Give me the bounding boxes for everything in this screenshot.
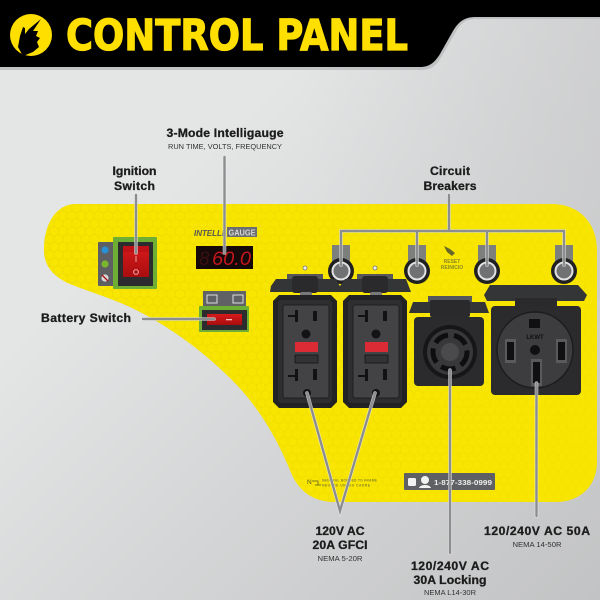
label: 3-mode intelligauge: RUN TIME, VOLTS, FREQUENCY xyxy=(168,142,282,151)
label: 3-mode intelligauge: 3-Mode Intelligauge xyxy=(166,126,284,140)
label: 20A GFCI xyxy=(312,524,368,563)
digital display: 60.0 xyxy=(212,249,251,270)
neutral bonding note: NEUTRE UNI AU CADRE xyxy=(322,484,371,488)
label: 20A GFCI: 20A GFCI xyxy=(312,538,368,552)
label: ignition switch: Ignition xyxy=(112,164,156,178)
label: 3-mode intelligauge xyxy=(166,126,284,151)
label: 30A locking xyxy=(411,559,489,597)
label: 50A xyxy=(484,524,590,549)
label: 20A GFCI: NEMA 5-20R xyxy=(318,554,363,563)
outlet: 14-50 xyxy=(484,285,587,395)
ignition switch xyxy=(113,237,157,289)
label: 50A: NEMA 14-50R xyxy=(512,540,562,549)
digital display xyxy=(196,246,253,270)
neutral bonding note xyxy=(307,478,378,488)
icon: status indicator plate xyxy=(98,242,118,286)
neutral bonding note: N xyxy=(307,479,312,486)
intelligauge logo xyxy=(194,227,257,238)
GFCI outlet A xyxy=(270,266,343,408)
label: 30A locking: 120/240V AC xyxy=(411,559,489,573)
neutral bonding note: NEUTRAL BONDED TO FRAME xyxy=(322,478,378,482)
label: ignition switch xyxy=(112,164,156,193)
reset label: RESET xyxy=(444,259,460,265)
outlet: L14-30 locking xyxy=(409,296,489,386)
header banner xyxy=(0,0,600,70)
phone number plate xyxy=(404,473,495,490)
panel: yellow control panel xyxy=(44,204,597,502)
label: circuit breakers: Breakers xyxy=(424,179,477,193)
title: CONTROL PANEL xyxy=(66,11,408,61)
label: 30A locking: NEMA L14-30R xyxy=(424,588,477,597)
reset label: REINICIO xyxy=(441,265,463,271)
label: ignition switch: Switch xyxy=(114,179,155,193)
GFCI outlet B xyxy=(338,266,411,408)
leader lines xyxy=(136,157,564,553)
phone number plate: 1-877-338-0999 xyxy=(434,478,492,487)
label: circuit breakers xyxy=(424,164,477,193)
label: 30A locking: 30A Locking xyxy=(414,573,486,587)
label: 20A GFCI: 120V AC xyxy=(316,524,365,538)
circuit breakers xyxy=(328,245,577,284)
label: circuit breakers: Circuit xyxy=(430,164,470,178)
battery switch xyxy=(199,291,249,332)
icon: logo hand xyxy=(10,14,52,56)
intelligauge logo: INTELLI xyxy=(194,228,225,238)
label: battery switch: Battery Switch xyxy=(41,311,131,325)
digital display: 8 xyxy=(199,249,210,270)
reset label xyxy=(441,246,463,271)
label: 50A: 120/240V AC 50A xyxy=(484,524,590,538)
outlet: 14-50: LKWT xyxy=(526,335,544,341)
intelligauge logo: GAUGE xyxy=(228,228,256,238)
